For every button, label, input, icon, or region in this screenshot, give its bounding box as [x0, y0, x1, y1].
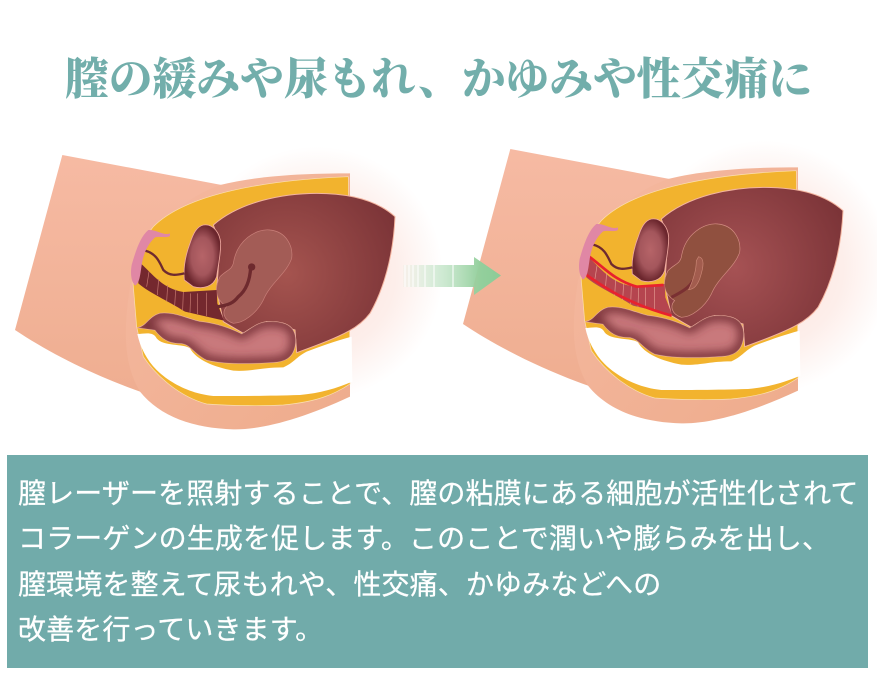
- thigh: [15, 155, 222, 392]
- vulva: [579, 224, 618, 280]
- diagram: after treatment: [463, 136, 877, 423]
- uterine canal: [671, 257, 703, 297]
- bladder: [632, 219, 669, 282]
- panel: description: [7, 455, 868, 668]
- urethra: [593, 245, 632, 269]
- text line 1: 膣レーザーを照射することで、膣の粘膜にある細胞が活性化されて: [18, 478, 859, 509]
- white cavity: [585, 327, 800, 390]
- body outline: [126, 173, 350, 429]
- text line 3: 膣環境を整えて尿もれや、性交痛、かゆみなどへの: [18, 569, 661, 600]
- uterus: [665, 224, 740, 317]
- large organ mass: [213, 193, 395, 353]
- uterus: [217, 230, 292, 323]
- urethra: [145, 251, 184, 275]
- fat layer: [133, 177, 350, 406]
- title: 膣の緩みや尿もれ、かゆみや性交痛に: [65, 56, 812, 104]
- white cavity: [137, 333, 352, 396]
- illustration area: [15, 149, 872, 430]
- uterine canal: [218, 263, 255, 307]
- vagina: [138, 262, 224, 321]
- diagram: before treatment: [15, 142, 442, 429]
- soft glow: [192, 142, 442, 405]
- rectum: [585, 307, 744, 357]
- large organ mass: [661, 187, 843, 347]
- rectum: [137, 313, 296, 363]
- thigh: [463, 149, 670, 386]
- vagina with red renewed mucosa: [586, 256, 672, 316]
- fat layer: [581, 171, 798, 400]
- soft glow: [640, 136, 877, 399]
- bladder: [184, 225, 221, 288]
- body outline: [574, 167, 798, 423]
- arrow: before to after: [403, 257, 501, 295]
- text line 2: コラーゲンの生成を促します。このことで潤いや膨らみを出し、: [18, 523, 830, 554]
- text line 4: 改善を行っていきます。: [18, 614, 323, 645]
- vulva: [131, 230, 170, 286]
